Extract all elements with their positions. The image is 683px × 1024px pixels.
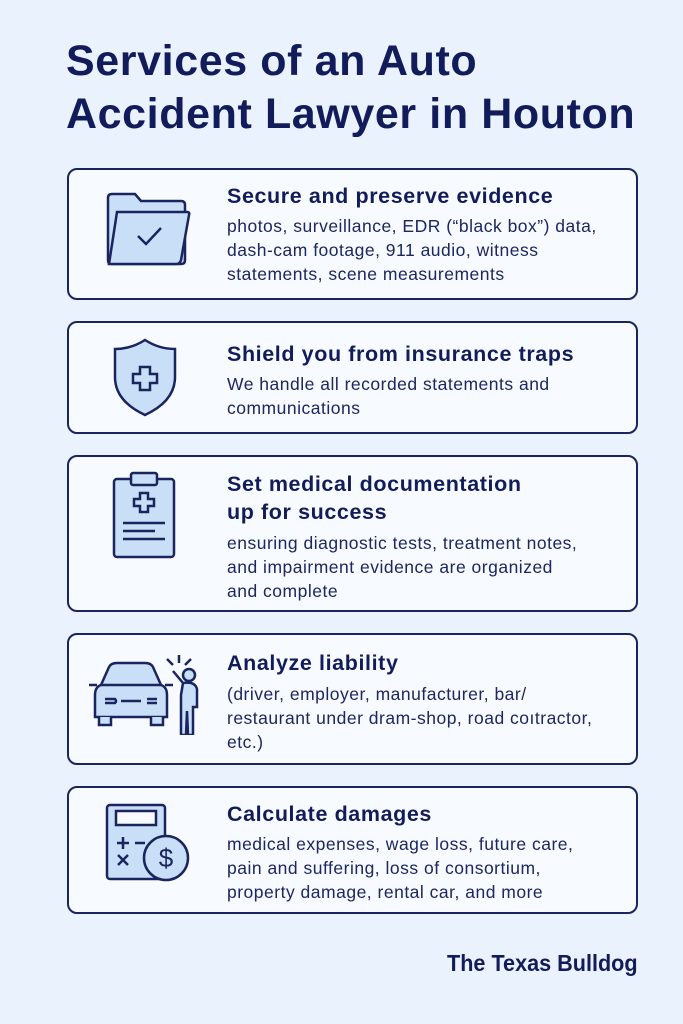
body text: [227, 684, 592, 752]
body text: pain and suffering, loss of consortium,: [227, 858, 541, 878]
body text: ensuring diagnostic tests, treatment notes,: [227, 533, 577, 553]
panel: liability: [67, 633, 638, 765]
body text: and complete: [227, 581, 338, 601]
body text: [227, 374, 550, 418]
body text: restaurant under dram-shop, road coıtractor,: [227, 708, 592, 728]
icon: calculator with dollar: $: [159, 843, 174, 873]
brand: The Texas Bulldog: [447, 950, 638, 976]
icon: folder: [106, 192, 190, 266]
heading: [227, 472, 522, 524]
heading: Shield you from insurance traps: [227, 342, 574, 366]
title: Accident Lawyer in Houton: [66, 90, 635, 138]
body text: dash-cam footage, 911 audio, witness: [227, 240, 538, 260]
body text: medical expenses, wage loss, future care,: [227, 834, 573, 854]
body text: [227, 216, 597, 284]
icon: calculator with dollar: [106, 804, 190, 882]
body text: statements, scene measurements: [227, 264, 505, 284]
body text: communications: [227, 398, 360, 418]
heading: Analyze liability: [227, 651, 399, 675]
icon: shield: [114, 338, 176, 416]
body text: (driver, employer, manufacturer, bar/: [227, 684, 527, 704]
heading: Secure and preserve evidence: [227, 184, 553, 208]
body text: [227, 533, 577, 601]
body text: and impairment evidence are organized: [227, 557, 553, 577]
panel: damages: [67, 786, 638, 914]
icon: clipboard: [112, 472, 176, 558]
heading: Set medical documentation: [227, 472, 522, 496]
body text: We handle all recorded statements and: [227, 374, 550, 394]
icon: car and person: [89, 655, 198, 735]
body text: [227, 834, 573, 902]
body text: property damage, rental car, and more: [227, 882, 543, 902]
heading: up for success: [227, 500, 387, 524]
body text: photos, surveillance, EDR (“black box”) data,: [227, 216, 597, 236]
body text: etc.): [227, 732, 264, 752]
heading: Calculate damages: [227, 802, 432, 826]
title: Services of an Auto: [66, 37, 477, 85]
panel: insurance: [67, 321, 638, 434]
panel: medical: [67, 455, 638, 612]
title: [66, 37, 635, 138]
panel: evidence: [67, 168, 638, 300]
